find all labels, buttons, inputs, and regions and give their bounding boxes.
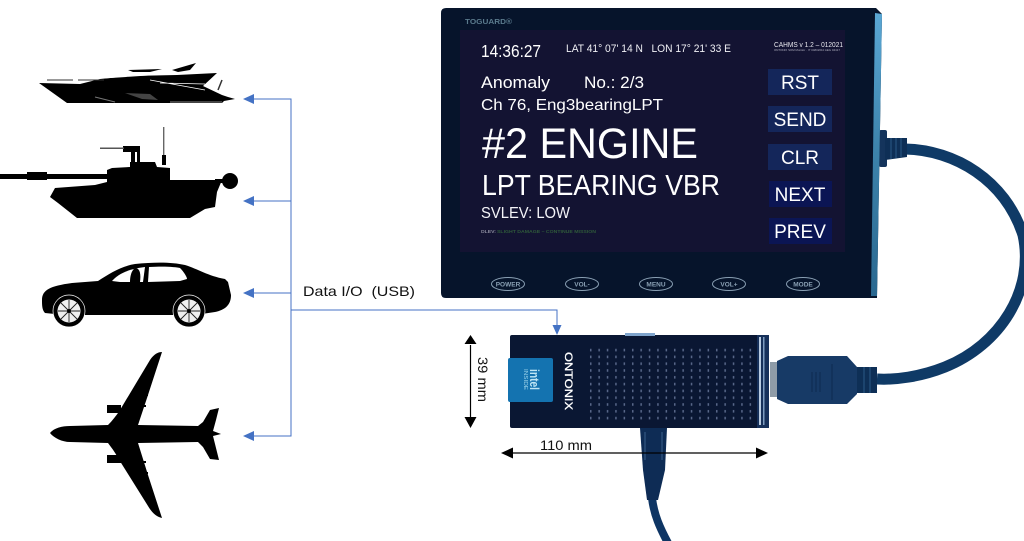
brand name: ONTONIX bbox=[562, 352, 574, 411]
metal end strip bbox=[757, 335, 769, 428]
anomaly line: Anomaly bbox=[481, 73, 551, 92]
GPS coordinates: LAT 41° 07' 14 N LON 17° 21' 33 E bbox=[566, 43, 731, 55]
hardware buttons: MENU bbox=[646, 282, 666, 288]
channel line: Ch 76, Eng3bearingLPT bbox=[481, 97, 663, 114]
hardware buttons: VOL+ bbox=[720, 282, 738, 288]
hardware buttons bbox=[492, 278, 820, 290]
intel badge: intel bbox=[527, 369, 542, 390]
hardware buttons: POWER bbox=[496, 282, 521, 288]
vent dots bbox=[585, 345, 755, 421]
version label: ONTONIX SOM Monitor · IT 04802610 AEG 04417 bbox=[774, 49, 841, 52]
dimension: height: 39 mm bbox=[475, 357, 491, 402]
clock: 14:36:27 bbox=[481, 41, 541, 61]
brand label: TOGUARD® bbox=[465, 17, 513, 26]
dimension: width bbox=[501, 437, 768, 458]
version label bbox=[774, 40, 843, 52]
arrow: to tank bbox=[243, 196, 254, 206]
panel: monitor bbox=[441, 8, 882, 298]
version label: CAHMS v 1.2 – 012021 bbox=[774, 40, 843, 49]
intel badge bbox=[508, 358, 553, 402]
arrow: to dongle bbox=[552, 325, 562, 335]
button: SEND bbox=[768, 106, 832, 132]
icon: tank silhouette bbox=[0, 127, 238, 218]
anomaly number: No.: 2/3 bbox=[584, 73, 644, 92]
arrow: to car bbox=[243, 288, 254, 298]
damage level: SLIGHT DAMAGE – CONTINUE MISSION bbox=[497, 229, 597, 235]
button: NEXT bbox=[769, 181, 832, 207]
damage level bbox=[481, 229, 597, 235]
hardware buttons: VOL- bbox=[574, 282, 590, 288]
button: RST bbox=[768, 69, 832, 95]
screen bbox=[460, 30, 845, 252]
damage level: DLEV: bbox=[481, 229, 496, 235]
cable: dongle bottom power bbox=[640, 428, 668, 541]
arrow: to airplane bbox=[243, 431, 254, 441]
button: PREV bbox=[769, 218, 832, 244]
button: CLR: CLR bbox=[781, 148, 819, 169]
button: NEXT: NEXT bbox=[775, 185, 826, 206]
icon: yacht silhouette bbox=[39, 63, 235, 103]
connector: blue data bus lines bbox=[253, 99, 557, 436]
severity level: SVLEV: LOW bbox=[481, 205, 571, 222]
button: PREV: PREV bbox=[774, 222, 826, 243]
connector: HDMI plug bbox=[770, 356, 877, 404]
panel: compute dongle bbox=[508, 333, 769, 428]
icon: airplane silhouette bbox=[50, 352, 221, 518]
button: CLR bbox=[768, 144, 832, 170]
icon: car silhouette bbox=[42, 263, 231, 327]
arrow: to yacht bbox=[243, 94, 254, 104]
connector: monitor side strain relief bbox=[879, 130, 907, 167]
intel badge: INSIDE bbox=[522, 369, 528, 390]
cable: monitor to dongle bbox=[877, 149, 1024, 379]
button: RST: RST bbox=[781, 73, 819, 94]
subheading: bearing: LPT BEARING VBR bbox=[482, 170, 720, 202]
dimension: height bbox=[464, 335, 491, 428]
heading: engine: #2 ENGINE bbox=[482, 120, 698, 168]
label: data link: Data I/O (USB) bbox=[303, 283, 415, 299]
dimension: width: 110 mm bbox=[540, 437, 592, 453]
hardware buttons: MODE bbox=[793, 282, 813, 288]
button: SEND: SEND bbox=[774, 110, 826, 131]
